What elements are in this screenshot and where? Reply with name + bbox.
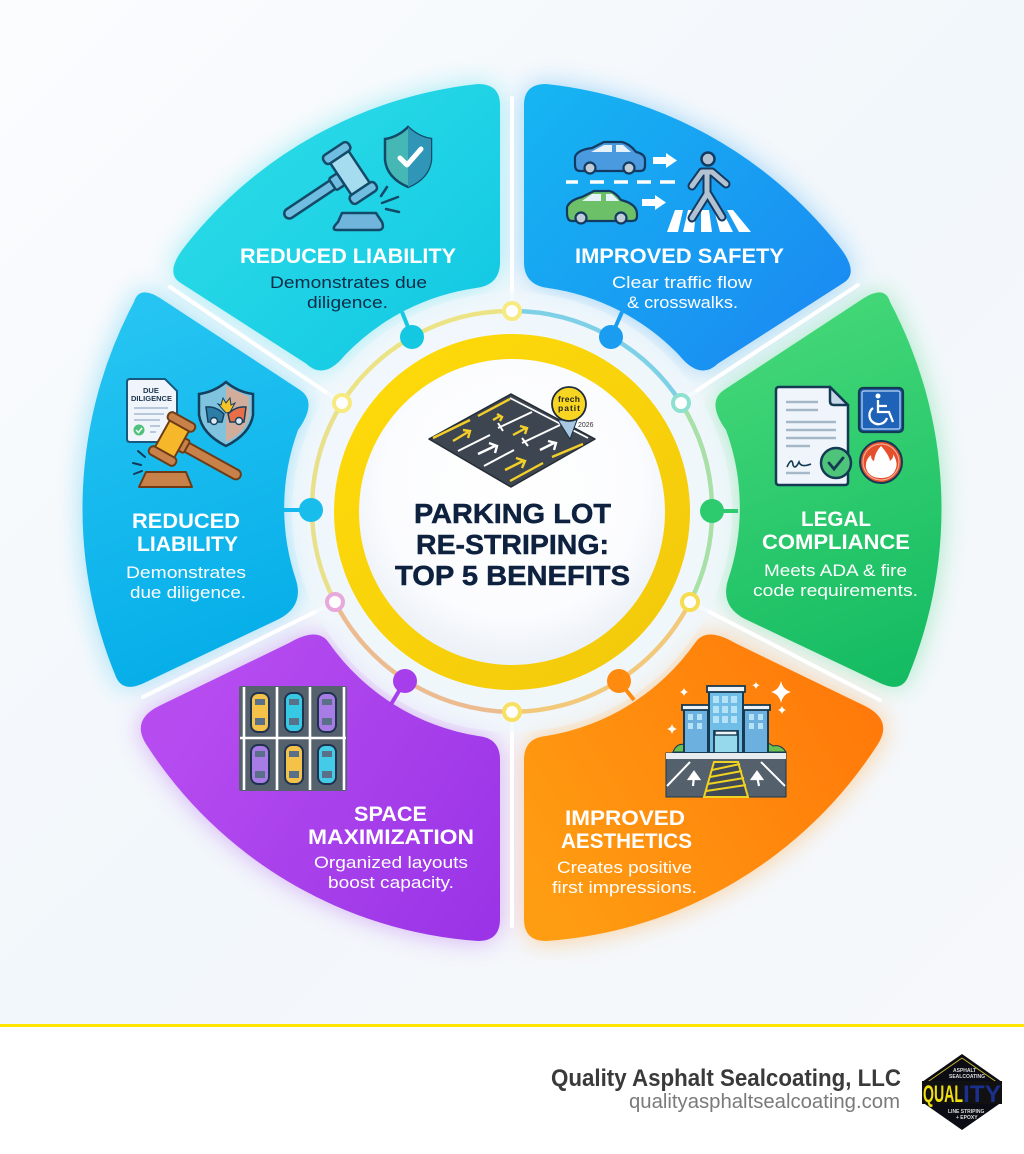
title: TOP 5 BENEFITS xyxy=(395,560,630,591)
icon: cars and pedestrian crossing xyxy=(566,142,751,232)
icon: building and parking lot xyxy=(666,681,791,797)
heading: REDUCED xyxy=(132,509,240,533)
heading: LIABILITY xyxy=(137,532,238,556)
description: Meets ADA & fire xyxy=(764,561,907,580)
icon: parking lot with six cars xyxy=(239,686,347,791)
description: code requirements. xyxy=(753,581,918,600)
website: qualityasphaltsealcoating.com xyxy=(629,1091,900,1113)
icon: due diligence document, shield and gavel: DUE xyxy=(143,386,159,395)
heading xyxy=(561,806,692,853)
heading: LEGAL xyxy=(801,507,871,531)
description: Clear traffic flow xyxy=(612,273,753,292)
logo: ITY xyxy=(963,1081,1001,1108)
heading: IMPROVED xyxy=(565,806,685,830)
icon: parking lot with pin xyxy=(429,387,595,487)
description: & crosswalks. xyxy=(627,293,738,312)
panel: improved safety xyxy=(524,84,851,371)
sector shape xyxy=(524,84,851,371)
panel: improved aesthetics xyxy=(524,634,883,941)
description: diligence. xyxy=(307,293,388,312)
icon: due diligence document, shield and gavel: DILIGENCE xyxy=(131,394,172,403)
heading: IMPROVED SAFETY xyxy=(575,244,784,268)
ring halo xyxy=(292,292,732,732)
title: RE-STRIPING: xyxy=(416,529,609,560)
panel: reduced liability top xyxy=(173,84,500,371)
heading xyxy=(132,509,240,556)
icon: parking lot with pin: frech xyxy=(558,394,580,404)
center hub xyxy=(334,334,690,690)
sector shape xyxy=(715,292,942,687)
white disc xyxy=(359,359,665,665)
description: boost capacity. xyxy=(328,873,454,892)
heading: REDUCED LIABILITY xyxy=(240,244,456,268)
heading: AESTHETICS xyxy=(561,829,692,853)
heading: COMPLIANCE xyxy=(762,530,910,554)
divider lines xyxy=(143,98,880,926)
logo: SEALCOATING xyxy=(949,1074,985,1080)
icon: gavel and shield xyxy=(269,127,431,240)
hollow glowing nodes xyxy=(327,303,698,720)
sector shape xyxy=(173,84,500,371)
logo: QUAL xyxy=(923,1081,963,1108)
panel: legal compliance xyxy=(715,292,942,687)
description xyxy=(753,561,918,600)
filled nodes xyxy=(299,325,724,693)
description: Organized layouts xyxy=(314,853,468,872)
description xyxy=(612,273,753,312)
sector glows xyxy=(82,84,942,941)
description xyxy=(314,853,468,892)
description xyxy=(552,858,697,897)
icon: parking lot with pin: patit xyxy=(558,403,580,413)
logo: + EPOXY xyxy=(956,1115,978,1121)
company name: Quality Asphalt Sealcoating, LLC xyxy=(551,1065,901,1092)
panel: space maximization xyxy=(141,634,500,941)
description xyxy=(126,563,246,602)
ring with nodes xyxy=(284,292,738,732)
connector stubs xyxy=(284,312,738,706)
description: due diligence. xyxy=(130,583,246,602)
heading: SPACE xyxy=(354,802,427,826)
description xyxy=(270,273,427,312)
icon: document, accessibility and fire xyxy=(776,387,903,485)
logo: LINE STRIPING xyxy=(948,1109,985,1115)
yellow ring xyxy=(334,334,690,690)
icon: parking lot with pin: 2026 xyxy=(578,422,594,429)
description: first impressions. xyxy=(552,878,697,897)
sector shape xyxy=(524,634,883,941)
description: Demonstrates due xyxy=(270,273,427,292)
logo xyxy=(922,1054,1002,1130)
title: PARKING LOT xyxy=(414,498,611,529)
title xyxy=(395,498,630,591)
heading xyxy=(308,802,474,849)
footer yellow rule xyxy=(0,1024,1024,1027)
description: Demonstrates xyxy=(126,563,246,582)
heading xyxy=(762,507,910,554)
sector shape xyxy=(82,292,309,687)
icon: due diligence document, shield and gavel xyxy=(127,379,253,498)
panel: reduced liability left xyxy=(82,292,309,687)
description: Creates positive xyxy=(557,858,692,877)
footer xyxy=(0,1024,1024,1154)
heading: MAXIMIZATION xyxy=(308,825,474,849)
sector shape xyxy=(141,634,500,941)
logo: ASPHALT xyxy=(953,1068,976,1074)
